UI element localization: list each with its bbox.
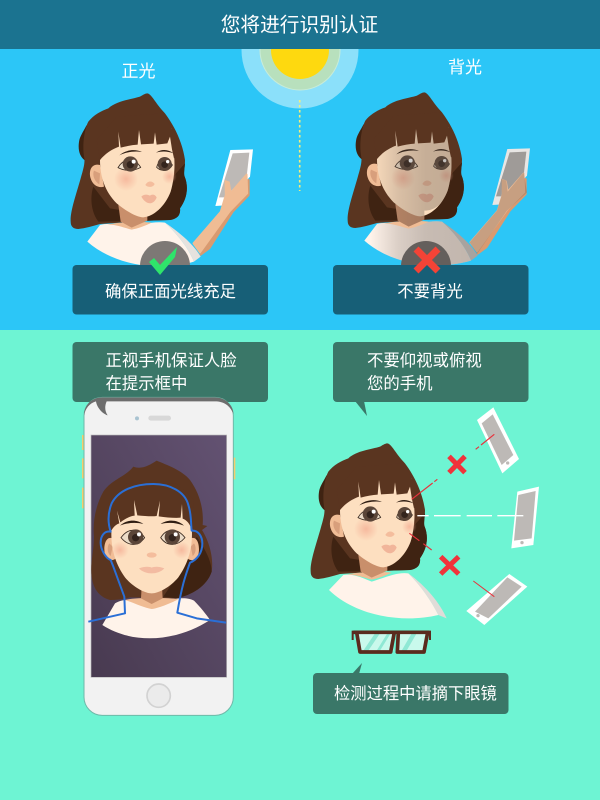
badge: grey circle behind cross — [401, 241, 451, 266]
callout: no backlight — [333, 265, 528, 314]
phone body — [84, 397, 233, 715]
icon: red cross — [416, 249, 438, 271]
callout: face the phone — [72, 342, 268, 402]
callout: face the phone: 在提示框中 — [106, 375, 187, 393]
callout: remove glasses — [313, 663, 508, 714]
screen — [91, 435, 227, 677]
illustration: girl with phone angle — [311, 443, 447, 618]
icon: upper red cross — [449, 456, 465, 473]
icon: phone level — [511, 487, 539, 548]
callout: do not look up or down — [333, 342, 528, 416]
badge: grey circle behind check — [140, 241, 190, 266]
callout: ensure light — [72, 265, 268, 314]
phone — [492, 148, 530, 205]
icon: glasses — [353, 631, 430, 652]
camera and speaker — [135, 416, 139, 420]
illustration: phone with face frame — [82, 397, 235, 715]
illustration: girl in front light — [71, 93, 253, 266]
icon: sun — [242, 0, 358, 108]
callout: remove glasses: 检测过程中请摘下眼镜 — [334, 684, 497, 703]
shirt — [442, 222, 478, 261]
icon: phone tilted up — [476, 407, 519, 473]
illustration: girl with backlight — [348, 92, 530, 265]
sight lines and crosses — [409, 456, 523, 574]
callout: ensure light: 确保正面光线充足 — [105, 283, 236, 301]
label: front light: 正光 — [122, 62, 156, 81]
frontal girl — [91, 461, 212, 638]
phone — [215, 149, 253, 206]
dotted sunlight divider — [299, 100, 301, 191]
callout: no backlight: 不要背光 — [397, 283, 463, 301]
title: 您将进行识别认证 — [221, 14, 378, 36]
side buttons — [82, 435, 235, 508]
label: back light: 背光 — [448, 58, 482, 77]
callout: do not look up or down: 您的手机 — [367, 375, 433, 393]
icon: green check — [149, 247, 177, 275]
shirt — [408, 573, 447, 618]
home button — [147, 684, 170, 707]
shadow on face — [377, 127, 452, 227]
icon: phone tilted down — [466, 574, 527, 625]
background: lower mint panel — [0, 330, 600, 800]
shirt — [165, 223, 201, 262]
face guide outline — [88, 484, 226, 623]
callout: face the phone: 正视手机保证人脸 — [106, 352, 237, 370]
callout: do not look up or down: 不要仰视或俯视 — [367, 352, 482, 370]
icon: lower red cross — [441, 557, 459, 574]
header bar — [0, 0, 600, 49]
background: upper sky panel — [0, 0, 600, 330]
